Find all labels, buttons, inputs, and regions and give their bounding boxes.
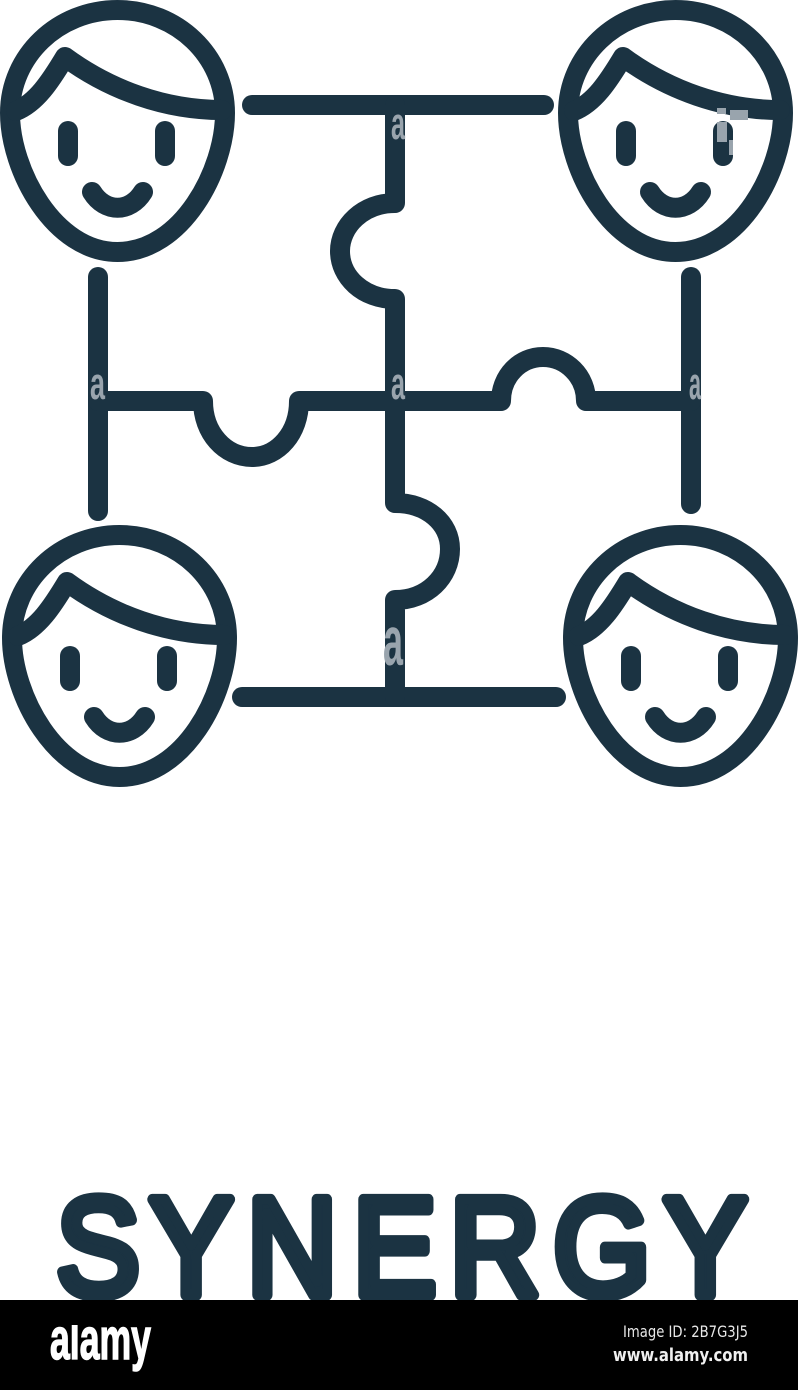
image id: Image ID: 2B7G3J5 xyxy=(623,1322,748,1341)
watermark marks: a xyxy=(391,98,406,149)
icon: person top left xyxy=(10,10,225,252)
website: www.alamy.com xyxy=(613,1345,748,1366)
watermark marks: a xyxy=(90,358,106,409)
icon: person bottom right xyxy=(573,535,788,777)
watermark marks: a xyxy=(391,358,406,409)
icon: person bottom left xyxy=(12,535,227,777)
icon: person top right xyxy=(568,10,783,252)
footer bar xyxy=(0,1300,798,1390)
watermark marks: a xyxy=(689,358,701,409)
footer logo: alamy xyxy=(50,1307,151,1372)
watermark marks xyxy=(90,98,748,680)
watermark marks: al xyxy=(383,602,413,680)
icon: puzzle connecting the people xyxy=(98,105,691,697)
title: SYNERGY xyxy=(56,1170,747,1325)
